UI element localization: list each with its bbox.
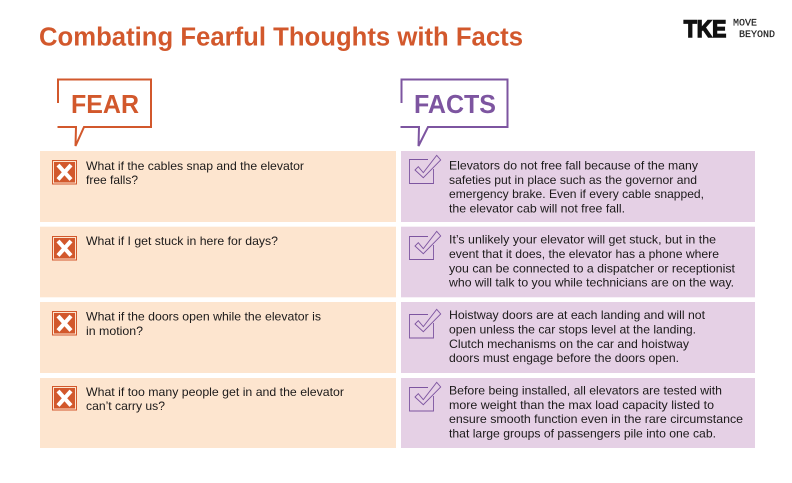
fear panel 2	[40, 227, 396, 297]
facts text 2: who will talk to you while technicians are on the way.	[448, 276, 734, 290]
fear text 1: free falls?	[86, 173, 138, 187]
facts text 1: emergency brake. Even if every cable snapped,	[449, 187, 704, 201]
facts text 2: you can be connected to a dispatcher or receptionist	[449, 262, 736, 276]
facts panel 2	[401, 227, 755, 297]
facts text 3: doors must engage before the doors open.	[449, 351, 679, 365]
facts text 3	[449, 308, 706, 365]
facts text 1: the elevator cab will not free fall.	[449, 202, 625, 216]
logo: TKE Move Beyond	[684, 16, 775, 43]
facts text 4: that large groups of passengers pile into one cab.	[449, 426, 716, 440]
fear text 4	[86, 385, 344, 413]
fear panel 4	[40, 378, 396, 448]
facts text 4: more weight than the max load capacity listed to	[449, 398, 714, 412]
icon: check box	[410, 382, 441, 411]
facts text 3: Hoistway doors are at each landing and will not	[449, 308, 706, 322]
fear text 4: can’t carry us?	[86, 399, 165, 413]
facts text 1	[449, 158, 704, 216]
icon: x box	[52, 160, 76, 184]
facts panel 4	[401, 378, 755, 448]
fear text 1: What if the cables snap and the elevator	[86, 159, 304, 173]
icon: x box	[52, 386, 76, 410]
fear text 1	[86, 159, 304, 187]
title: Combating Fearful Thoughts with Facts	[39, 24, 523, 52]
fear panel 1	[40, 151, 396, 222]
logo: TKE Move Beyond: TKE	[684, 16, 726, 43]
facts text 4: ensure smooth function even in the rare circumstance	[449, 412, 743, 426]
facts text 2	[448, 232, 736, 290]
facts text 2: event that it does, the elevator has a phone where	[449, 247, 719, 261]
facts panel 1	[401, 151, 755, 222]
facts text 2: It’s unlikely your elevator will get stuck, but in the	[449, 232, 716, 246]
facts text 1: safeties put in place such as the governor and	[449, 173, 697, 187]
icon: x box	[52, 236, 76, 260]
heading: facts speech bubble	[400, 80, 508, 146]
icon: check box	[410, 155, 441, 184]
icon: x box	[52, 312, 76, 335]
facts text 3: open unless the car stops level at the landing.	[449, 322, 696, 336]
facts text 3: Clutch mechanisms on the car and hoistway	[449, 337, 689, 351]
facts panel 3	[401, 302, 755, 373]
icon: check box	[410, 231, 441, 260]
fear text 3: What if the doors open while the elevator is	[86, 310, 321, 324]
fear text 3	[86, 310, 321, 338]
logo: TKE Move Beyond: BEYOND	[739, 30, 775, 41]
facts text 4: Before being installed, all elevators are tested with	[449, 384, 722, 398]
facts text 4	[449, 384, 743, 440]
fear text 4: What if too many people get in and the elevator	[86, 385, 344, 399]
facts text 1: Elevators do not free fall because of the many	[449, 158, 698, 172]
heading: fear speech bubble	[58, 80, 151, 146]
fear text 3: in motion?	[86, 324, 143, 338]
heading: facts speech bubble: FACTS	[414, 91, 496, 119]
heading: fear speech bubble: FEAR	[71, 91, 139, 119]
fear text 2: What if I get stuck in here for days?	[86, 234, 278, 248]
fear panel 3	[40, 302, 396, 373]
icon: check box	[410, 309, 441, 338]
logo: TKE Move Beyond: MOVE	[733, 18, 757, 30]
